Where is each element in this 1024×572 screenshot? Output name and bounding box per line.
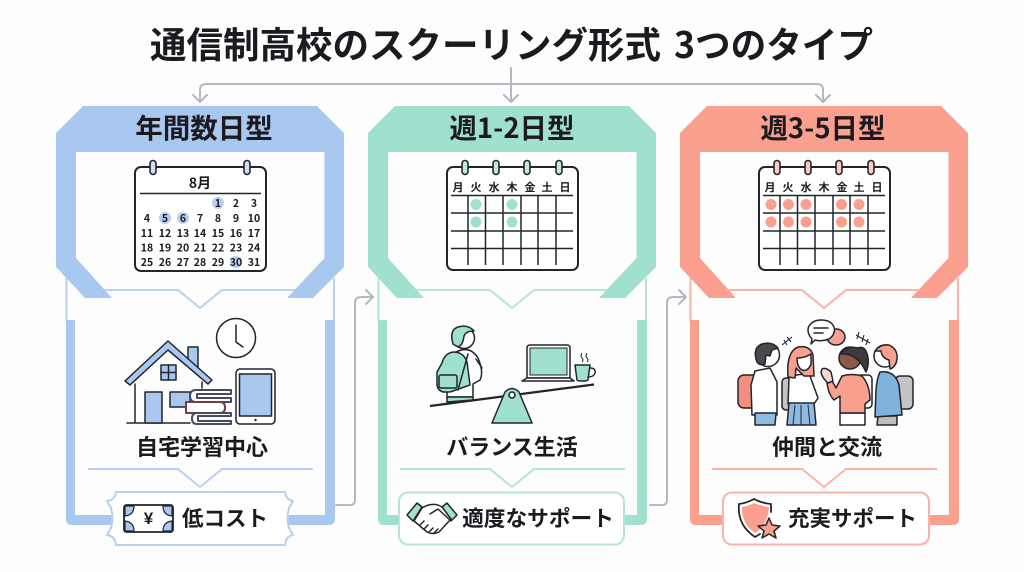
calendar: weekly, two days: 木	[506, 179, 518, 195]
calendar: August: 19	[159, 240, 171, 256]
calendar: August: 21	[194, 240, 206, 256]
icon: shield and star	[739, 499, 780, 538]
badge: 適度なサポート	[399, 492, 624, 544]
icon: house, clock, books and tablet	[125, 318, 275, 424]
calendar: August: 15	[212, 226, 224, 241]
panel frame: teal	[368, 106, 656, 525]
calendar: August: 13	[177, 226, 189, 241]
calendar: weekly, five days: 月	[764, 179, 776, 195]
calendar: weekly, five days	[759, 160, 890, 270]
icon: yen bill: ¥	[144, 509, 154, 528]
calendar: August: 28	[194, 255, 206, 270]
icon: yen bill	[124, 505, 173, 532]
label: 自宅学習中心: 自宅学習中心	[136, 430, 268, 462]
calendar: weekly, two days: 火	[470, 179, 482, 195]
heading: 週3-5日型	[760, 106, 886, 146]
label: 充実サポート: 充実サポート	[788, 502, 917, 533]
label: 仲間と交流: 仲間と交流	[772, 430, 882, 462]
calendar: August: 17	[248, 226, 260, 241]
arrow: first to second panel	[336, 290, 373, 505]
student 1	[738, 343, 780, 425]
calendar: August: 23	[230, 240, 242, 256]
icon: handshake	[407, 503, 457, 534]
heading: 年間数日型	[135, 106, 273, 146]
calendar: August: 5	[162, 211, 168, 226]
student 4	[874, 345, 913, 425]
calendar: August: 8	[215, 211, 221, 226]
panel frame: blue	[56, 106, 344, 525]
calendar: August: 3	[251, 196, 257, 211]
arrow: title branches to the three types	[193, 68, 830, 102]
icon: four students talking	[738, 320, 913, 425]
panel: 週1-2日型	[368, 106, 656, 544]
title: 3つのタイプ	[674, 16, 873, 69]
ticket: 低コスト	[107, 492, 293, 545]
student 3	[821, 347, 872, 425]
calendar: weekly, five days: 金	[836, 179, 848, 195]
calendar: weekly, two days: 水	[488, 179, 500, 195]
calendar: August	[135, 160, 266, 271]
calendar: August: 20	[177, 240, 189, 256]
calendar: August: 29	[212, 255, 224, 270]
speech bubbles	[808, 320, 845, 345]
calendar: weekly, five days: 土	[854, 179, 864, 195]
calendar: August: 24	[248, 240, 260, 256]
calendar: August: 22	[212, 240, 224, 256]
heading: 週1-2日型	[449, 106, 575, 146]
panel: 年間数日型	[56, 106, 344, 545]
panel: 週3-5日型	[680, 106, 968, 544]
calendar: August: 9	[233, 211, 239, 226]
label: 低コスト: 低コスト	[182, 502, 268, 533]
calendar: August: 7	[197, 211, 203, 226]
calendar: August: 6	[180, 211, 186, 226]
title: 通信制高校のスクーリング形式	[150, 16, 661, 69]
label: バランス生活: バランス生活	[446, 430, 578, 462]
calendar: August: 14	[194, 226, 206, 241]
calendar: August: 27	[177, 255, 189, 270]
calendar: weekly, five days: 木	[818, 179, 830, 195]
calendar: August: 16	[230, 226, 242, 241]
badge: 充実サポート	[723, 492, 929, 544]
calendar: weekly, two days: 土	[542, 179, 552, 195]
label: 適度なサポート: 適度なサポート	[462, 502, 614, 533]
calendar: weekly, two days: 月	[452, 179, 464, 195]
calendar: August: 4	[144, 211, 150, 226]
calendar: weekly, five days: 火	[782, 179, 794, 195]
calendar: August: 1	[215, 196, 221, 211]
calendar: August: 30	[230, 255, 242, 270]
calendar: August: 31	[248, 255, 260, 270]
calendar: August: 12	[159, 226, 171, 241]
student 2	[782, 347, 818, 425]
sparkle marks	[782, 332, 870, 345]
calendar: August: 10	[248, 211, 260, 226]
calendar: weekly, two days	[447, 160, 578, 270]
calendar: August: 25	[141, 255, 153, 270]
calendar: August: 18	[141, 240, 153, 256]
calendar: weekly, five days: 日	[872, 179, 882, 195]
calendar: weekly, five days: 水	[800, 179, 812, 195]
calendar: August: 11	[141, 226, 153, 241]
calendar: weekly, two days: 日	[560, 179, 570, 195]
arrow: second to third panel	[650, 290, 686, 505]
calendar: August: 8月	[189, 173, 211, 193]
calendar: August: 26	[159, 255, 171, 270]
calendar: weekly, two days: 金	[524, 179, 536, 195]
panel frame: salmon	[680, 106, 968, 525]
icon: student and laptop on a balance	[430, 326, 595, 423]
calendar: August: 2	[233, 196, 239, 211]
